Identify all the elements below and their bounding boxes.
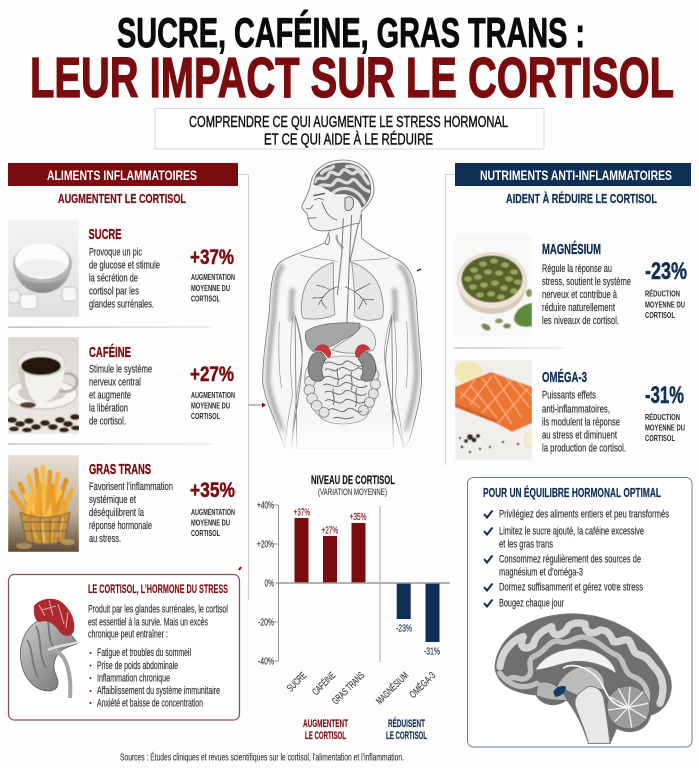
- symptom list: Inflammation chronique: [97, 672, 170, 684]
- y axis labels: +40%: [257, 500, 274, 512]
- callout text: Produit par les glandes surrénales, le cortisol: [88, 604, 228, 616]
- symptom list: [90, 647, 220, 710]
- left panel header: [8, 163, 238, 206]
- subtitle box: COMPRENDRE CE QUI AUGMENTE LE STRESS HORMONAL: [189, 114, 508, 131]
- head and face: [302, 160, 374, 231]
- intestines: [305, 356, 378, 424]
- magnesium text: [542, 241, 631, 327]
- subtitle box: ET CE QUI AIDE À LE RÉDUIRE: [264, 130, 433, 148]
- photo: fries basket: [8, 455, 79, 552]
- group label: increase: [303, 718, 348, 742]
- icon: kidney with adrenal gland: [20, 599, 78, 698]
- bar value labels: +37%: [294, 508, 310, 518]
- red bars: [294, 518, 366, 583]
- fries stat: CORTISOL: [191, 528, 220, 538]
- group label: decrease: [386, 717, 427, 742]
- panel: cortisol, stress hormone: [8, 574, 240, 720]
- magnesium text: MAGNÉSIUM: [542, 241, 601, 258]
- group label: decrease: RÉDUISENT: [388, 717, 425, 730]
- coffee text: et augmente: [89, 390, 131, 402]
- category labels: MAGNÉSIUM: [373, 669, 411, 707]
- brain: [314, 163, 370, 208]
- omega-3 stat: RÉDUCTION: [645, 412, 680, 422]
- photo: sugar bowl: [8, 220, 79, 317]
- fries stat: +35%: [190, 479, 235, 502]
- tips checklist: magnésium et d’oméga-3: [499, 566, 583, 578]
- ear: [345, 197, 354, 211]
- coffee text: CAFÉINE: [89, 344, 131, 361]
- omega-3 text: OMÉGA-3: [542, 369, 587, 386]
- sugar text: cortisol par les: [89, 286, 139, 298]
- omega-3 text: anti-inflammatoires,: [542, 404, 610, 416]
- sugar stat: [190, 246, 235, 304]
- omega-3 stat: CORTISOL: [645, 433, 675, 443]
- face features: [313, 193, 325, 196]
- fries text: GRAS TRANS: [89, 461, 151, 478]
- fries text: au stress.: [89, 533, 121, 545]
- category labels: SUCRE: [285, 670, 309, 694]
- coffee text: de cortisol.: [89, 416, 126, 428]
- blue bars: [397, 583, 440, 642]
- fries text: déséquilibrent la: [89, 507, 145, 519]
- omega-3 text: [542, 369, 626, 454]
- magnesium stat: [645, 258, 687, 320]
- fries stat: [190, 479, 235, 538]
- illustration: human body anatomy: [263, 160, 423, 452]
- fries text: systémique et: [89, 494, 136, 506]
- omega-3 text: au stress et diminuent: [542, 430, 617, 442]
- liver and stomach: [305, 323, 360, 352]
- magnesium stat: CORTISOL: [645, 310, 675, 320]
- connector: left column to body: [238, 174, 266, 600]
- panel: inflammatory foods: [7, 163, 238, 552]
- group label: increase: LE CORTISOL: [305, 730, 346, 742]
- category labels: GRAS TRANS: [330, 670, 367, 707]
- bar value labels: [294, 508, 440, 658]
- category labels: OMÉGA-3: [406, 669, 438, 701]
- bar value labels: +27%: [322, 526, 338, 536]
- panel: hormonal balance tips: [468, 478, 692, 747]
- y axis labels: -40%: [258, 656, 274, 668]
- callout text: [88, 604, 228, 640]
- magnesium text: les niveaux de cortisol.: [542, 315, 619, 327]
- chart title: [311, 475, 395, 497]
- fries stat: MOYENNE DU: [191, 518, 230, 528]
- coffee stat: [190, 363, 235, 421]
- bar chart: cortisol level: [257, 475, 450, 742]
- magnesium text: réduire naturellement: [542, 302, 615, 314]
- sources: Sources : Études cliniques et revues scientifiques sur le cortisol, l’alimentation et l’inflammation.: [120, 750, 404, 764]
- omega-3 text: Puissants effets: [542, 390, 596, 402]
- chart title: (VARIATION MOYENNE): [318, 487, 387, 497]
- photo: coffee cup: [7, 337, 81, 434]
- y axis labels: 0%: [264, 578, 274, 590]
- tips checklist: Bougez chaque jour: [499, 598, 564, 610]
- chart title: NIVEAU DE CORTISOL: [311, 475, 395, 487]
- sugar text: glandes surrénales.: [89, 298, 154, 310]
- sugar text: SUCRE: [88, 226, 122, 243]
- y axis labels: -20%: [258, 618, 274, 628]
- coffee stat: MOYENNE DU: [191, 400, 230, 410]
- lungs: [301, 262, 383, 320]
- symptom list: Anxiété et baisse de concentration: [97, 698, 203, 710]
- symptom list: Affaiblissement du système immunitaire: [97, 685, 220, 697]
- neck and airway: [325, 215, 358, 328]
- left panel header: AUGMENTENT LE CORTISOL: [58, 191, 186, 206]
- bar value labels: -31%: [424, 646, 440, 658]
- coffee text: Stimule le système: [89, 364, 152, 376]
- panel: anti-inflammatory nutrients: [453, 163, 691, 460]
- fries text: réponse hormonale: [89, 520, 152, 532]
- coffee text: nerveux central: [89, 376, 141, 388]
- bar value labels: -23%: [396, 624, 412, 634]
- magnesium text: Régule la réponse au: [542, 263, 612, 275]
- sugar text: [88, 226, 160, 310]
- symptom list: Prise de poids abdominale: [97, 660, 178, 672]
- y axis labels: +20%: [257, 540, 274, 550]
- sugar text: Provoque un pic: [89, 246, 142, 258]
- fries stat: AUGMENTATION: [191, 507, 235, 517]
- body shading: [268, 265, 417, 432]
- callout text: chronique peut entraîner :: [88, 628, 168, 640]
- coffee text: la libération: [89, 402, 128, 414]
- tips checklist: et les gras trans: [499, 538, 553, 550]
- photo: salmon fillet: [453, 360, 533, 460]
- fries text: [89, 461, 173, 545]
- group label: decrease: LE CORTISOL: [386, 730, 427, 742]
- fries text: Favorisent l’inflammation: [89, 481, 173, 493]
- y axis labels: [257, 500, 274, 668]
- tips checklist: [484, 508, 669, 610]
- coffee text: [89, 344, 152, 428]
- sugar text: la sécrétion de: [89, 272, 138, 284]
- magnesium text: nerveux et contribue à: [542, 289, 618, 301]
- connector: right column to body: [417, 174, 455, 465]
- left panel header: ALIMENTS INFLAMMATOIRES: [47, 167, 197, 183]
- category labels: [285, 669, 438, 707]
- right panel header: [455, 163, 691, 206]
- omega-3 text: ils modulent la réponse: [542, 416, 620, 428]
- omega-3 text: la production de cortisol.: [542, 442, 626, 454]
- symptom list: Fatigue et troubles du sommeil: [97, 647, 191, 659]
- sugar stat: CORTISOL: [191, 294, 220, 304]
- coffee stat: CORTISOL: [191, 411, 220, 421]
- illustration: brain cross-section: [492, 610, 678, 747]
- sugar stat: AUGMENTATION: [191, 272, 235, 282]
- sugar stat: MOYENNE DU: [191, 283, 230, 293]
- sugar text: de glucose et stimule: [89, 260, 160, 272]
- category labels: CAFÉINE: [309, 669, 338, 698]
- omega-3 stat: [645, 382, 685, 443]
- callout text: est essentiel à la survie. Mais un excès: [88, 616, 208, 628]
- sugar stat: +37%: [190, 246, 234, 269]
- magnesium stat: RÉDUCTION: [645, 288, 680, 298]
- magnesium text: stress, soutient le système: [542, 276, 631, 288]
- coffee stat: +27%: [190, 363, 234, 386]
- group label: increase: AUGMENTENT: [303, 718, 348, 730]
- callout heading: LE CORTISOL, L’HORMONE DU STRESS: [88, 582, 228, 596]
- subtitle box: [155, 108, 544, 149]
- photo: pumpkin seeds bowl: [456, 252, 532, 332]
- title: [30, 9, 674, 110]
- bar value labels: +35%: [350, 512, 367, 523]
- kidneys with adrenal glands: [308, 344, 376, 381]
- coffee stat: AUGMENTATION: [191, 390, 235, 400]
